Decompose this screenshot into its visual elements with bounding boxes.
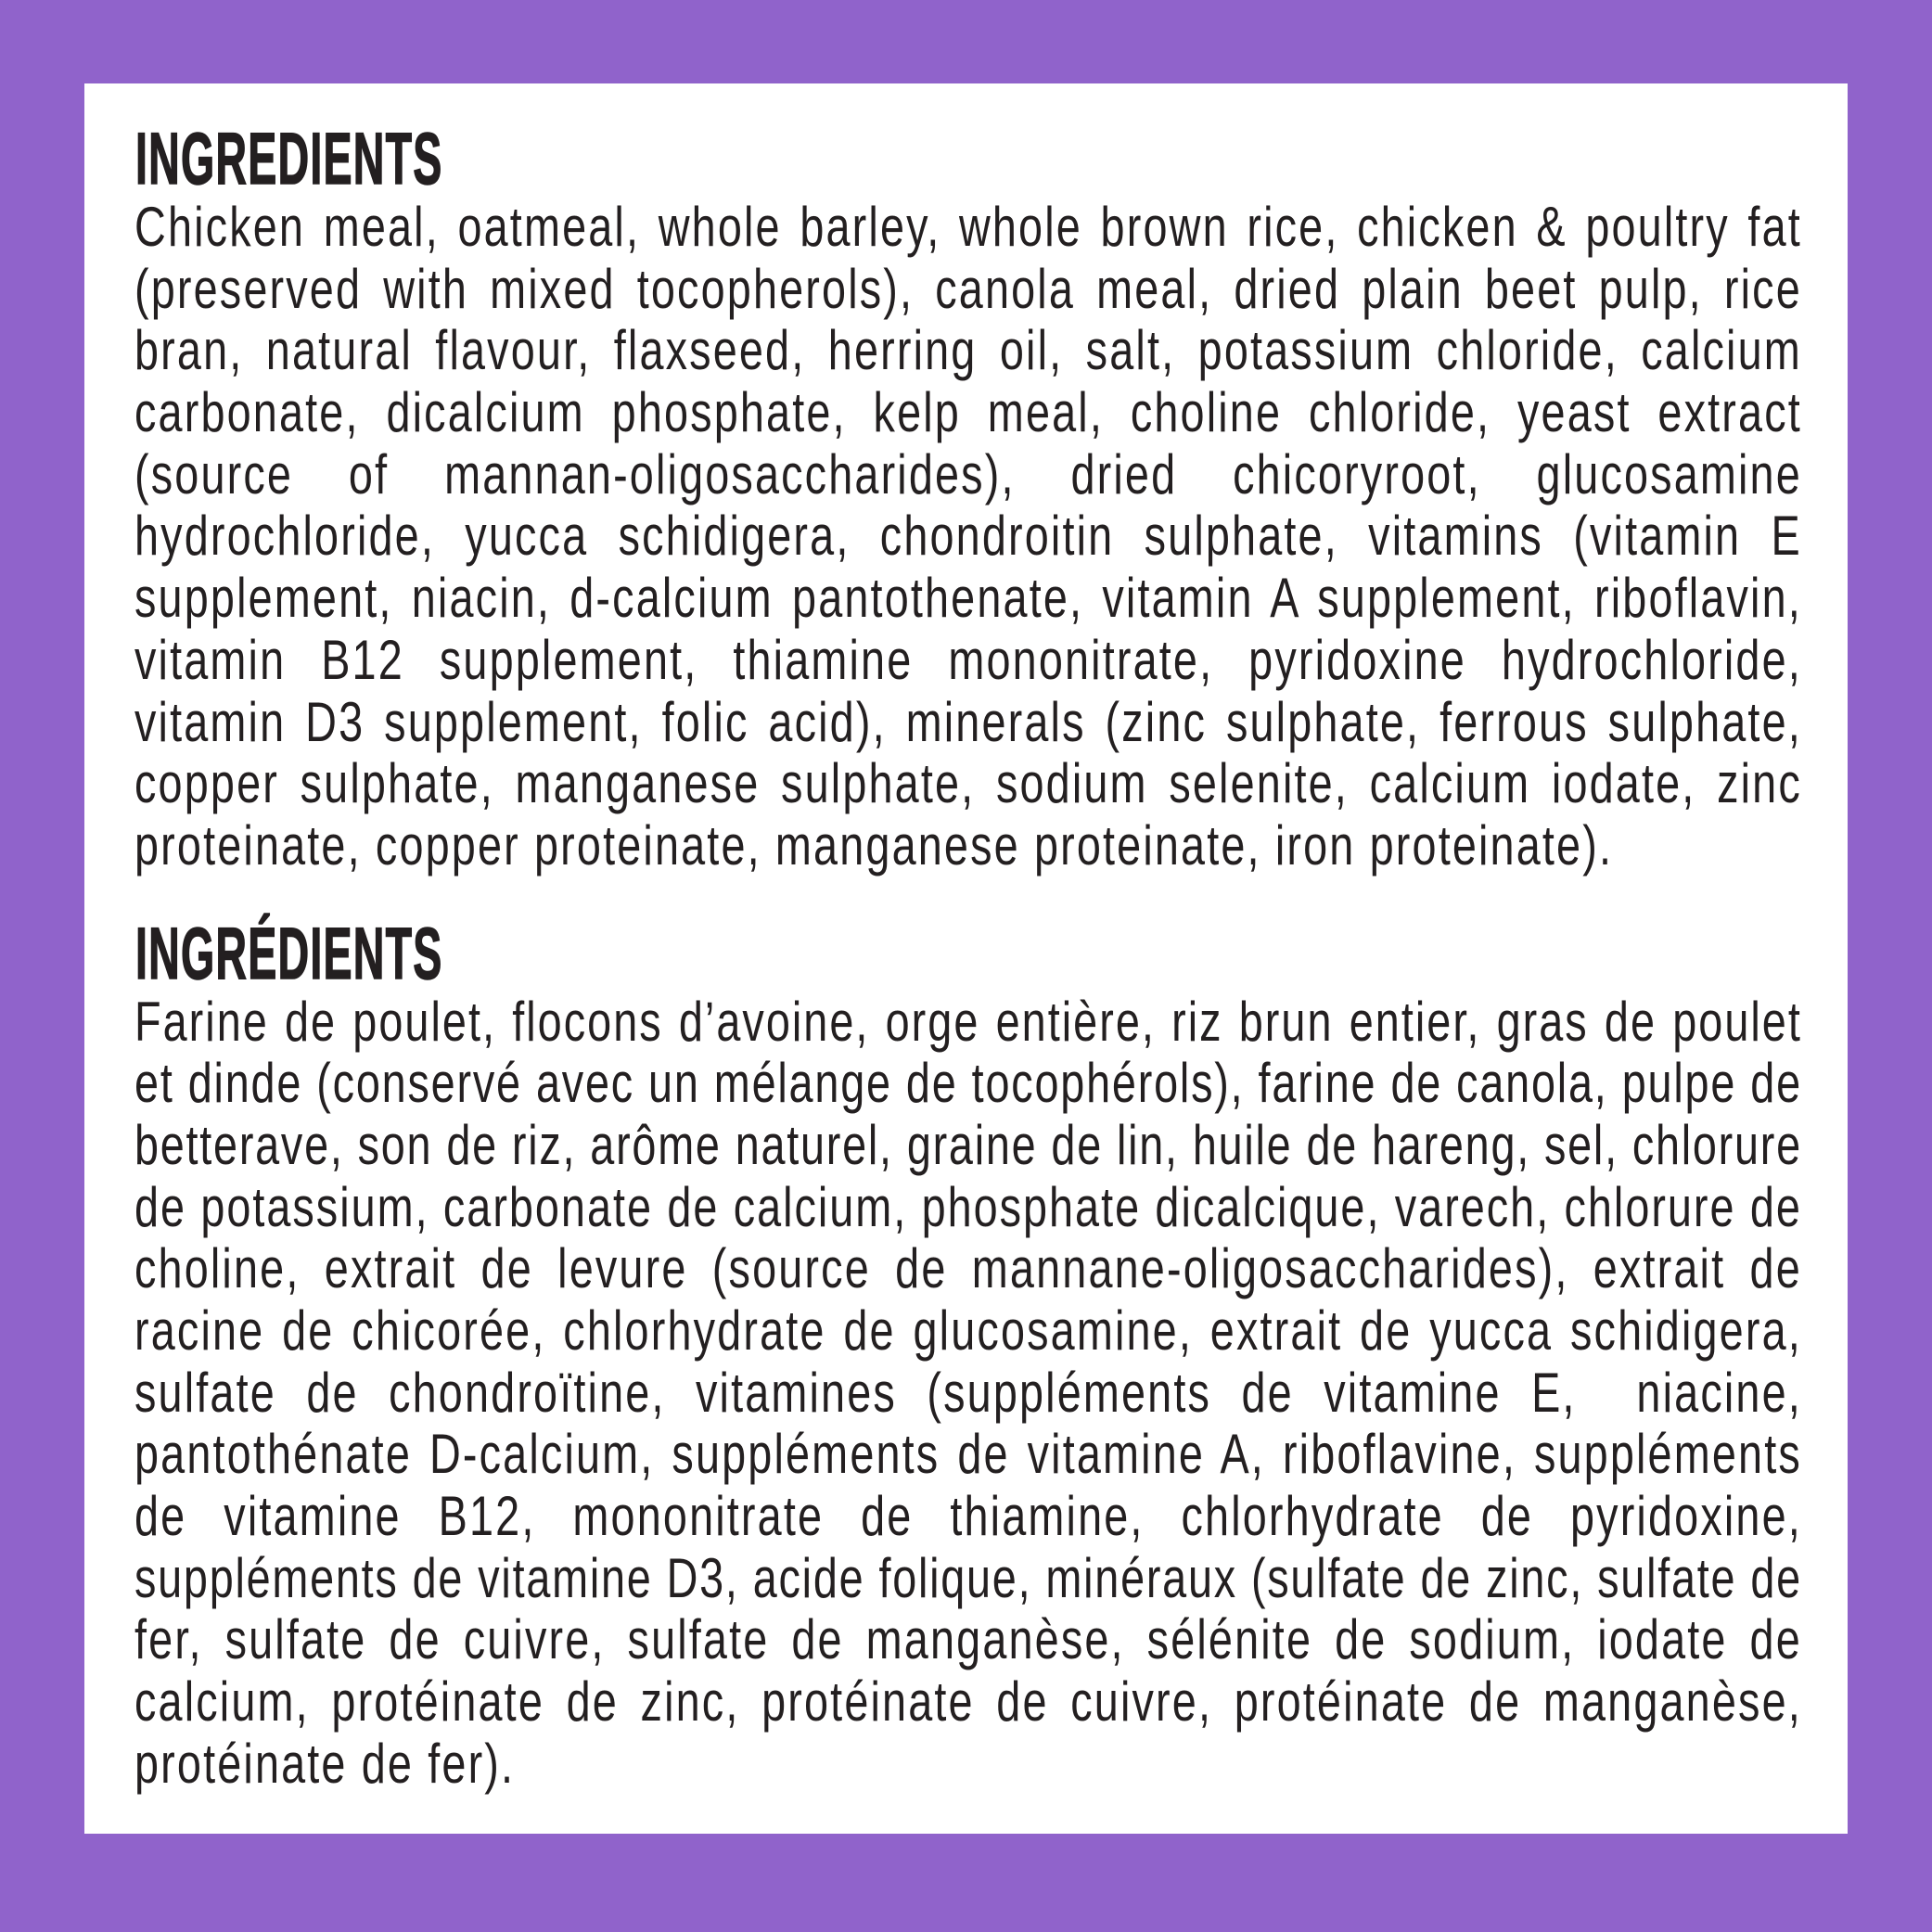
text block: French ingredients: fer, sulfate de cuivre, sulfate de manganèse, sélénite de sodium, iodate de <box>134 1608 1802 1670</box>
text block: French ingredients: racine de chicorée, chlorhydrate de glucosamine, extrait de yucca schidigera, <box>134 1299 1802 1362</box>
text block: French ingredients: de vitamine B12, mononitrate de thiamine, chlorhydrate de pyridoxine, <box>134 1485 1802 1547</box>
text block: French ingredients: et dinde (conservé avec un mélange de tocophérols), farine de canola, pulpe de <box>134 1052 1802 1114</box>
text block: English ingredients: hydrochloride, yucca schidigera, chondroitin sulphate, vitamins (vitamin E <box>134 505 1802 567</box>
text block: English ingredients: proteinate, copper proteinate, manganese proteinate, iron proteinate). <box>134 814 1613 876</box>
text block: French ingredients <box>134 991 1802 1795</box>
text block: French ingredients: betterave, son de riz, arôme naturel, graine de lin, huile de hareng, sel, chlorure <box>134 1114 1802 1176</box>
text block: French ingredients: pantothénate D-calcium, suppléments de vitamine A, riboflavine, suppléments <box>134 1423 1802 1485</box>
text block: English ingredients: Chicken meal, oatmeal, whole barley, whole brown rice, chicken & poultry fat <box>134 196 1802 258</box>
text block: English ingredients: vitamin D3 supplement, folic acid), minerals (zinc sulphate, ferrous sulphate, <box>134 690 1802 753</box>
heading: INGREDIENTS: INGREDIENTS <box>135 117 443 199</box>
heading: INGRÉDIENTS: INGRÉDIENTS <box>135 912 443 994</box>
text block: English ingredients: copper sulphate, manganese sulphate, sodium selenite, calcium iodate, zinc <box>134 752 1802 814</box>
text block: English ingredients: carbonate, dicalcium phosphate, kelp meal, choline chloride, yeast extract <box>134 381 1802 443</box>
text block: French ingredients: choline, extrait de levure (source de mannane-oligosaccharides), extrait de <box>134 1237 1802 1299</box>
text block: French ingredients: protéinate de fer). <box>134 1733 515 1795</box>
text block: English ingredients: bran, natural flavour, flaxseed, herring oil, salt, potassium chloride, calcium <box>134 319 1802 381</box>
text block: French ingredients: suppléments de vitamine D3, acide folique, minéraux (sulfate de zinc, sulfate de <box>134 1547 1802 1609</box>
text block: French ingredients: sulfate de chondroïtine, vitamines (suppléments de vitamine E, niacine, <box>134 1362 1802 1424</box>
text block: French ingredients: calcium, protéinate de zinc, protéinate de cuivre, protéinate de manganèse, <box>134 1670 1802 1733</box>
text block: English ingredients: (preserved with mixed tocopherols), canola meal, dried plain beet pulp, rice <box>134 258 1802 320</box>
text block: French ingredients: Farine de poulet, flocons d’avoine, orge entière, riz brun entier, gras de poulet <box>134 991 1802 1052</box>
text block: English ingredients: vitamin B12 supplement, thiamine mononitrate, pyridoxine hydrochloride, <box>134 629 1802 691</box>
text block: English ingredients: supplement, niacin, d-calcium pantothenate, vitamin A supplement, riboflavin, <box>134 567 1802 629</box>
text block: English ingredients <box>134 196 1802 876</box>
text block: French ingredients: de potassium, carbonate de calcium, phosphate dicalcique, varech, chlorure de <box>134 1176 1802 1238</box>
text block: English ingredients: (source of mannan-oligosaccharides), dried chicoryroot, glucosamine <box>134 443 1802 505</box>
